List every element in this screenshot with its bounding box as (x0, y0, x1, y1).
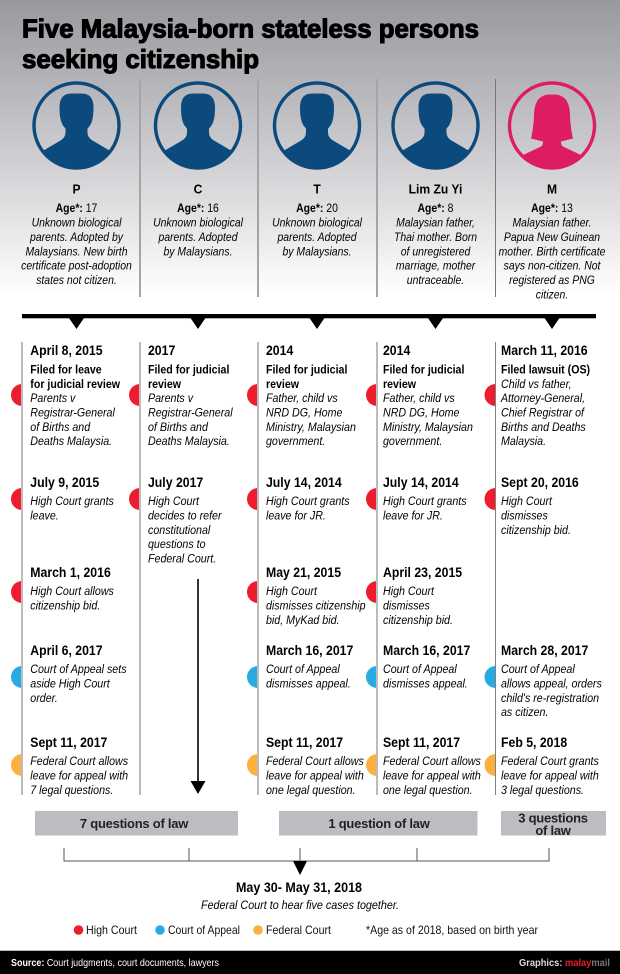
bracket joining cases (64, 848, 549, 875)
panel: profile M: mother. Birth certificate (499, 246, 605, 259)
timeline: case C (129, 342, 233, 795)
timeline: case C: decides to refer (148, 510, 223, 523)
box: 7 questions of law: 7 questions of law (80, 816, 189, 831)
timeline: case P: High Court allows (30, 585, 114, 598)
panel: profile Lim Zu Yi: Thai mother. Born (394, 231, 477, 244)
footer: Source: Court judgments, court documents, lawyers (11, 957, 219, 969)
timeline: case Lim Zu Yi: one legal question. (383, 784, 473, 797)
box: 1 question of law: 1 question of law (328, 816, 431, 831)
timeline: case P: April 6, 2017 (30, 642, 103, 658)
panel: profile C: C (194, 182, 202, 197)
timeline: case P: Filed for leave (30, 364, 102, 377)
divider bar with column pointers (22, 314, 596, 329)
icon: male silhouette C (156, 83, 240, 176)
panel: profile M: says non-citizen. Not (504, 260, 601, 273)
timeline: case Lim Zu Yi: Federal Court allows (383, 755, 481, 768)
timeline: case M: High Court (501, 495, 553, 508)
marker: High Court (247, 384, 258, 406)
title: seeking citizenship (22, 44, 259, 74)
timeline: case Lim Zu Yi: Court of Appeal (383, 663, 457, 676)
timeline: case M: Court of Appeal (501, 663, 575, 676)
timeline: case M: Attorney-General, (500, 392, 585, 405)
icon: female silhouette M (510, 83, 594, 176)
timeline: case M: Sept 20, 2016 (501, 474, 579, 490)
timeline: case M: Births and Deaths (501, 421, 586, 434)
panel: profile P (21, 83, 132, 287)
timeline: case C: July 2017 (148, 474, 203, 490)
timeline: case M: child's re-registration (501, 692, 599, 705)
timeline: case T: May 21, 2015 (266, 564, 341, 580)
timeline: case T: dismisses appeal. (266, 678, 351, 691)
legend: High Court (86, 923, 138, 937)
marker: High Court (129, 488, 140, 510)
timeline: case T: March 16, 2017 (266, 642, 353, 658)
timeline: case M: leave for appeal with (501, 770, 599, 783)
final hearing text (201, 880, 399, 912)
timeline: case M: Chief Registrar of (501, 407, 586, 420)
timeline: case Lim Zu Yi: leave for appeal with (383, 770, 481, 783)
footer: Graphics: malaymail (519, 957, 610, 969)
timeline: case Lim Zu Yi: March 16, 2017 (383, 642, 470, 658)
timeline: case T: Father, child vs (266, 392, 338, 405)
timeline: case Lim Zu Yi: NRD DG, Home (383, 407, 459, 420)
panel: profile T: by Malaysians. (283, 246, 351, 259)
timeline: case M: allows appeal, orders (501, 678, 602, 691)
timeline: case P: aside High Court (30, 678, 111, 691)
timeline: case Lim Zu Yi: government. (383, 435, 442, 448)
timeline: case Lim Zu Yi: April 23, 2015 (383, 564, 462, 580)
timeline: case C: Federal Court. (148, 553, 216, 566)
panel: profile T: parents. Adopted (277, 231, 357, 244)
timeline: case M: Feb 5, 2018 (501, 734, 567, 750)
timeline: case Lim Zu Yi (366, 342, 481, 797)
timeline: case Lim Zu Yi: Ministry, Malaysian (383, 421, 473, 434)
timeline: case M: as citizen. (501, 706, 548, 719)
timeline: case Lim Zu Yi: Filed for judicial (383, 364, 464, 377)
timeline: case C: Deaths Malaysia. (148, 435, 230, 448)
timeline: case P: leave. (30, 510, 59, 523)
timeline: case P (11, 342, 128, 797)
box: 3 questions of law (501, 810, 606, 838)
timeline: case P: Sept 11, 2017 (30, 734, 107, 750)
panel: profile M: M (547, 182, 557, 197)
timeline: case C: review (148, 378, 181, 391)
title: Five Malaysia-born stateless persons (22, 14, 479, 44)
timeline: case T: High Court grants (266, 495, 350, 508)
timeline: case T: leave for appeal with (266, 770, 364, 783)
marker: High Court (366, 384, 377, 406)
timeline: case C: Parents v (148, 392, 194, 405)
timeline: case Lim Zu Yi: July 14, 2014 (383, 474, 460, 490)
marker: High Court (366, 581, 377, 603)
marker: High Court (484, 384, 496, 406)
timeline: case P: Deaths Malaysia. (30, 435, 112, 448)
marker: Federal Court (366, 754, 377, 776)
panel: profile T: Unknown biological (272, 217, 362, 230)
timeline: case M: March 11, 2016 (501, 342, 588, 358)
marker: Court of Appeal (11, 666, 22, 688)
timeline: case C: Registrar-General (148, 407, 233, 420)
timeline: case C: Filed for judicial (148, 364, 229, 377)
legend: Federal Court (266, 923, 332, 937)
panel: profile P: Unknown biological (32, 217, 122, 230)
marker: Federal Court (11, 754, 22, 776)
panel: profile T: Age*: 20 (296, 202, 338, 215)
timeline: case M: Federal Court grants (501, 755, 599, 768)
timeline: case C: High Court (148, 495, 200, 508)
timeline: case Lim Zu Yi: High Court grants (383, 495, 467, 508)
panel: profile Lim Zu Yi: marriage, mother (396, 260, 476, 273)
timeline: case T: High Court (266, 585, 318, 598)
panel: profile Lim Zu Yi: Malaysian father, (396, 217, 475, 230)
timeline: case T: Sept 11, 2017 (266, 734, 343, 750)
legend: Court of Appeal (168, 923, 240, 937)
timeline: case P: High Court grants (30, 495, 114, 508)
timeline: case T: Ministry, Malaysian (266, 421, 356, 434)
timeline: case M: March 28, 2017 (501, 642, 588, 658)
timeline: case T: Federal Court allows (266, 755, 364, 768)
panel: profile T (272, 83, 362, 259)
marker: High Court (11, 581, 22, 603)
panel: profile P: parents. Adopted by (29, 231, 124, 244)
timeline: case P: July 9, 2015 (30, 474, 99, 490)
timeline: case P: Federal Court allows (30, 755, 128, 768)
panel: profile C: Unknown biological (153, 217, 243, 230)
timeline: case T: government. (266, 435, 325, 448)
panel: profile M: Papua New Guinean (504, 231, 600, 244)
timeline: case Lim Zu Yi: dismisses appeal. (383, 678, 468, 691)
panel: profile P: states not citizen. (36, 274, 117, 287)
timeline: case M: Filed lawsuit (OS) (501, 364, 590, 377)
marker: Court of Appeal (366, 666, 377, 688)
timeline: case T: review (266, 378, 299, 391)
title (22, 14, 479, 74)
timeline: case M: Child vs father, (501, 378, 572, 391)
icon: male silhouette Lim Zu Yi (393, 83, 478, 176)
timeline: case Lim Zu Yi: dismisses (383, 600, 430, 613)
timeline: case M: citizenship bid. (501, 524, 571, 537)
marker: Federal Court (484, 754, 496, 776)
timeline: case T (247, 342, 366, 797)
panel: profile M: Age*: 13 (531, 202, 573, 215)
timeline: case P: Parents v (30, 392, 77, 405)
timeline: case P: 7 legal questions. (30, 784, 113, 797)
panel: profile M: Malaysian father. (512, 217, 592, 230)
timeline: case T: 2014 (266, 342, 294, 358)
timeline: case P: Court of Appeal sets (30, 663, 127, 676)
panel: profile C: parents. Adopted (158, 231, 238, 244)
panel: profile M (499, 83, 605, 302)
arrow: to Federal Court (190, 579, 206, 794)
timeline: case P: leave for appeal with (30, 770, 128, 783)
panel: profile M: registered as PNG (509, 274, 595, 287)
panel: profile P: certificate post-adoption (21, 260, 132, 273)
marker: Federal Court (247, 754, 258, 776)
timeline: case Lim Zu Yi: 2014 (383, 342, 411, 358)
panel: profile Lim Zu Yi: untraceable. (407, 274, 464, 287)
timeline: case Lim Zu Yi: leave for JR. (383, 510, 443, 523)
marker: Court of Appeal (247, 666, 258, 688)
timeline: case P: March 1, 2016 (30, 564, 111, 580)
box: 3 questions of law: of law (535, 823, 572, 838)
panel: profile P: Malaysians. New birth (25, 246, 128, 259)
timeline: case P: Registrar-General (30, 407, 115, 420)
timeline: case P: of Births and (30, 421, 91, 434)
timeline: case M: Malaysia. (501, 435, 546, 448)
timeline: case T: one legal question. (266, 784, 356, 797)
timeline: case M: 3 legal questions. (501, 784, 584, 797)
panel: profile T: T (313, 182, 321, 197)
box: 7 questions of law (35, 811, 238, 836)
panel: profile C (153, 83, 243, 259)
final hearing text: May 30- May 31, 2018 (236, 880, 362, 895)
timeline: case P: citizenship bid. (30, 600, 100, 613)
box: 1 question of law (279, 811, 478, 836)
timeline: case P: April 8, 2015 (30, 342, 103, 358)
timeline: case M: dismisses (501, 510, 548, 523)
timeline: case Lim Zu Yi: review (383, 378, 416, 391)
footer (0, 950, 620, 974)
timeline: case T: dismisses citizenship (266, 600, 366, 613)
panel: profile P: P (72, 182, 81, 197)
timeline: case T: Filed for judicial (266, 364, 347, 377)
marker: Court of Appeal (484, 666, 496, 688)
panel: profile Lim Zu Yi: Age*: 8 (418, 202, 453, 215)
final hearing text: Federal Court to hear five cases together. (201, 898, 399, 912)
timeline: case Lim Zu Yi: Father, child vs (383, 392, 455, 405)
panel: profile Lim Zu Yi: of unregistered (401, 246, 471, 259)
marker: High Court (11, 384, 22, 406)
timeline: case P: for judicial review (30, 378, 120, 391)
timeline: case C: of Births and (148, 421, 209, 434)
icon: male silhouette P (34, 83, 119, 176)
panel: profile P: Age*: 17 (56, 202, 97, 215)
timeline: case C: questions to (148, 538, 206, 551)
legend: *Age as of 2018, based on birth year (366, 923, 538, 937)
timeline: case T: leave for JR. (266, 510, 326, 523)
panel: profile M: citizen. (536, 289, 568, 302)
timeline: case Lim Zu Yi: High Court (383, 585, 435, 598)
panel: profile Lim Zu Yi (393, 83, 478, 287)
timeline: case T: bid, MyKad bid. (266, 614, 340, 627)
timeline: case Lim Zu Yi: citizenship bid. (383, 614, 453, 627)
panel: profile C: by Malaysians. (164, 246, 232, 259)
timeline: case C: constitutional (148, 524, 211, 537)
timeline: case T: July 14, 2014 (266, 474, 343, 490)
marker: High Court (366, 488, 377, 510)
legend (74, 923, 538, 937)
marker: High Court (484, 488, 496, 510)
timeline: case T: NRD DG, Home (266, 407, 342, 420)
marker: High Court (11, 488, 22, 510)
timeline: case P: order. (30, 692, 58, 705)
timeline: case T: Court of Appeal (266, 663, 340, 676)
timeline: case M (484, 342, 602, 797)
panel: profile Lim Zu Yi: Lim Zu Yi (409, 182, 462, 197)
panel: profile C: Age*: 16 (177, 202, 219, 215)
marker: High Court (247, 581, 258, 603)
marker: High Court (129, 384, 140, 406)
marker: High Court (247, 488, 258, 510)
timeline: case Lim Zu Yi: Sept 11, 2017 (383, 734, 460, 750)
box: 3 questions of law: 3 questions (518, 810, 588, 826)
icon: male silhouette T (274, 83, 360, 176)
timeline: case C: 2017 (148, 342, 175, 358)
